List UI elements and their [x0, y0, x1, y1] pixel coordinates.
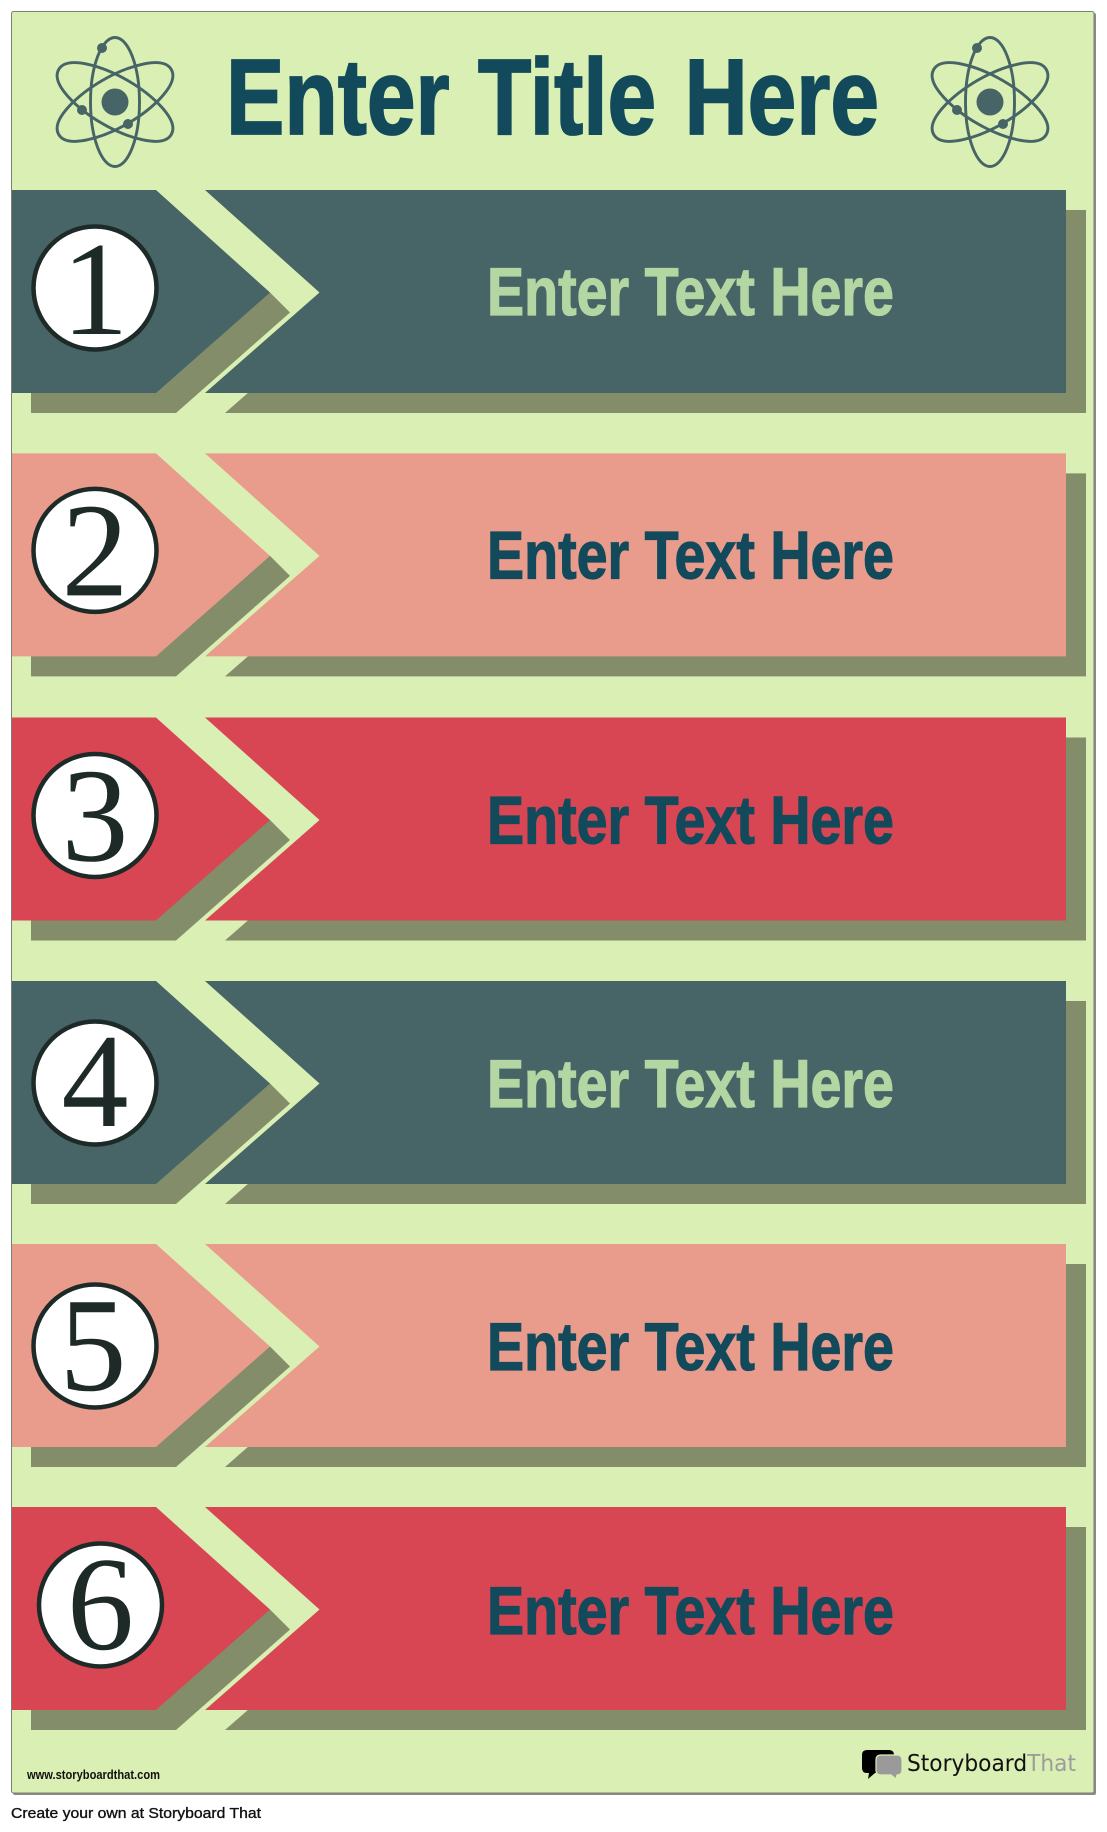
row 2 number badge — [34, 476, 156, 624]
row 3 number badge: 3 — [62, 742, 128, 890]
row 3 text: Enter Text Here — [487, 782, 894, 858]
row 6 number badge: 6 — [67, 1530, 134, 1678]
row 5 shadow — [31, 1264, 1086, 1467]
row 4 number badge: 4 — [62, 1007, 128, 1155]
row 4 text arrow — [205, 981, 1066, 1184]
row 1 — [12, 190, 1086, 413]
row 2 — [12, 453, 1086, 676]
row 1 number arrow — [12, 190, 270, 393]
row 6 shadow — [31, 1527, 1086, 1730]
storyboard that logo — [862, 1750, 1076, 1779]
row 1 text: Enter Text Here — [487, 254, 894, 330]
row 1 text arrow — [205, 190, 1066, 393]
footer credit: Create your own at Storyboard That — [11, 1806, 261, 1822]
row 3 shadow — [31, 738, 1086, 940]
row 5 number badge — [34, 1271, 156, 1419]
row 6 number arrow — [12, 1507, 270, 1710]
row 3 text arrow — [205, 718, 1066, 920]
row 4 number arrow — [12, 981, 270, 1184]
row 1 number badge — [34, 215, 156, 363]
logo wordmark: StoryboardThat — [907, 1751, 1076, 1777]
row 2 text arrow — [205, 453, 1066, 656]
row 2 number arrow — [12, 453, 270, 656]
row 4 shadow — [31, 1001, 1086, 1204]
website url: www.storyboardthat.com — [26, 1768, 160, 1782]
icon: atom left — [46, 38, 184, 166]
row 6 — [12, 1507, 1086, 1730]
row 1 shadow — [31, 210, 1086, 413]
row 2 text: Enter Text Here — [487, 517, 894, 593]
row 5 number badge: 5 — [60, 1271, 126, 1419]
icon: speech bubbles — [862, 1750, 902, 1779]
row 4 text: Enter Text Here — [487, 1046, 894, 1122]
row 6 text: Enter Text Here — [487, 1573, 894, 1649]
row 6 text arrow — [205, 1507, 1066, 1710]
row 6 number badge — [39, 1530, 162, 1678]
row 5 text arrow — [205, 1244, 1066, 1447]
row 4 number badge — [34, 1007, 156, 1155]
row 5 — [12, 1244, 1086, 1467]
row 3 — [12, 718, 1086, 940]
row 3 number arrow — [12, 718, 270, 920]
icon: atom right — [921, 38, 1059, 166]
row 5 number arrow — [12, 1244, 270, 1447]
title: Enter Title Here — [226, 36, 879, 157]
row 2 number badge: 2 — [62, 476, 128, 624]
row 5 text: Enter Text Here — [487, 1309, 894, 1385]
row 4 — [12, 981, 1086, 1204]
row 3 number badge — [34, 742, 156, 890]
row 1 number badge: 1 — [62, 215, 128, 363]
row 2 shadow — [31, 473, 1086, 676]
